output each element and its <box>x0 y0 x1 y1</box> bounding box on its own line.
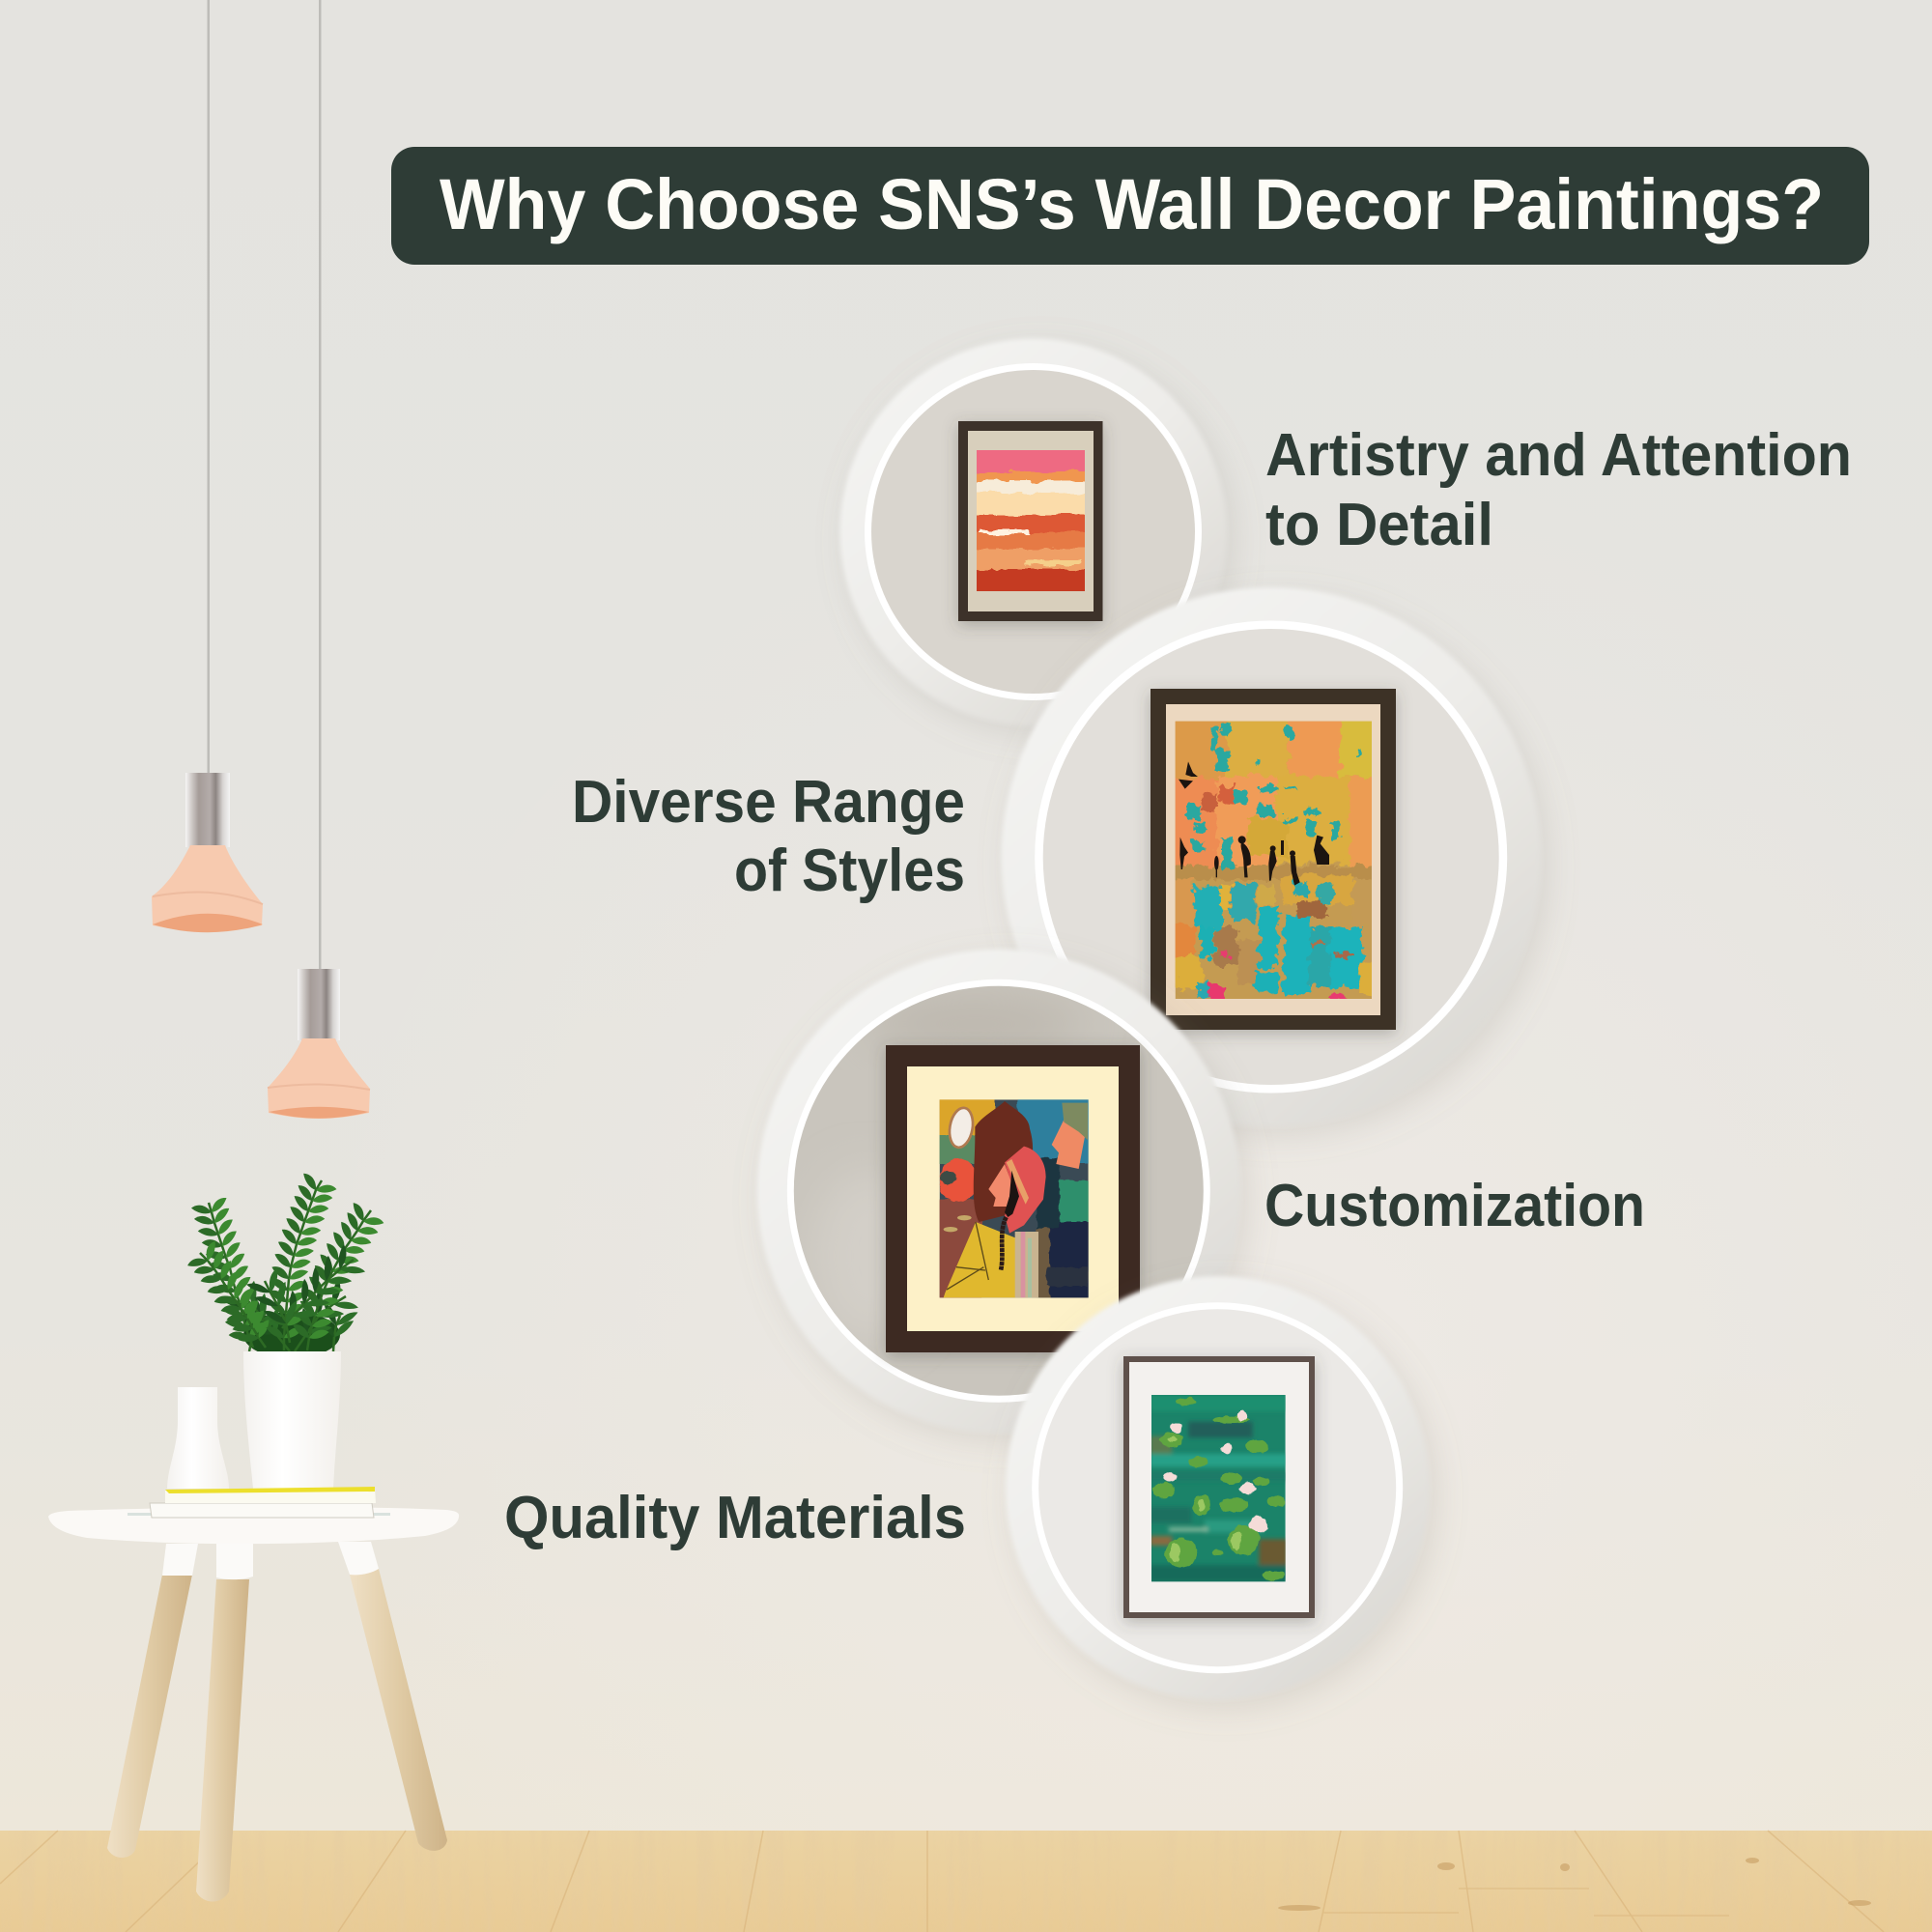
framed painting: figures on golden and teal abstract <box>1151 689 1396 1030</box>
framed painting: women in red hoods <box>886 1045 1140 1352</box>
books <box>128 1487 390 1518</box>
pot <box>243 1351 341 1489</box>
label: diverse range of styles: Diverse Range <box>572 769 965 836</box>
wooden floor <box>0 1831 1932 1932</box>
title banner <box>391 147 1869 265</box>
circle 4: quality materials painting <box>1006 1276 1429 1699</box>
label: customization: Customization <box>1264 1173 1645 1239</box>
pendant lamp left <box>152 0 263 932</box>
circle 2: diverse range painting <box>1002 587 1541 1126</box>
label: diverse range of styles: of Styles <box>734 838 965 904</box>
label: artistry and attention to detail: to Detail <box>1265 492 1493 558</box>
label: artistry and attention to detail: Artistry and Attention <box>1265 422 1852 489</box>
framed painting: water lilies <box>1123 1356 1315 1618</box>
label: artistry and attention to detail <box>1265 422 1852 558</box>
pendant lamp right <box>268 0 370 1119</box>
table top <box>48 1507 459 1544</box>
circle 3: customization painting <box>757 950 1240 1433</box>
label: quality materials: Quality Materials <box>504 1485 966 1551</box>
label: diverse range of styles <box>572 769 965 904</box>
title banner: Why Choose SNS’s Wall Decor Paintings? <box>440 164 1824 244</box>
vase <box>167 1387 229 1489</box>
circle 1: artistry painting <box>840 338 1227 724</box>
table legs <box>107 1542 447 1901</box>
side table with plant, vase and books <box>48 1180 459 1901</box>
plant <box>200 1180 371 1358</box>
framed painting: red and orange abstract <box>958 421 1103 621</box>
